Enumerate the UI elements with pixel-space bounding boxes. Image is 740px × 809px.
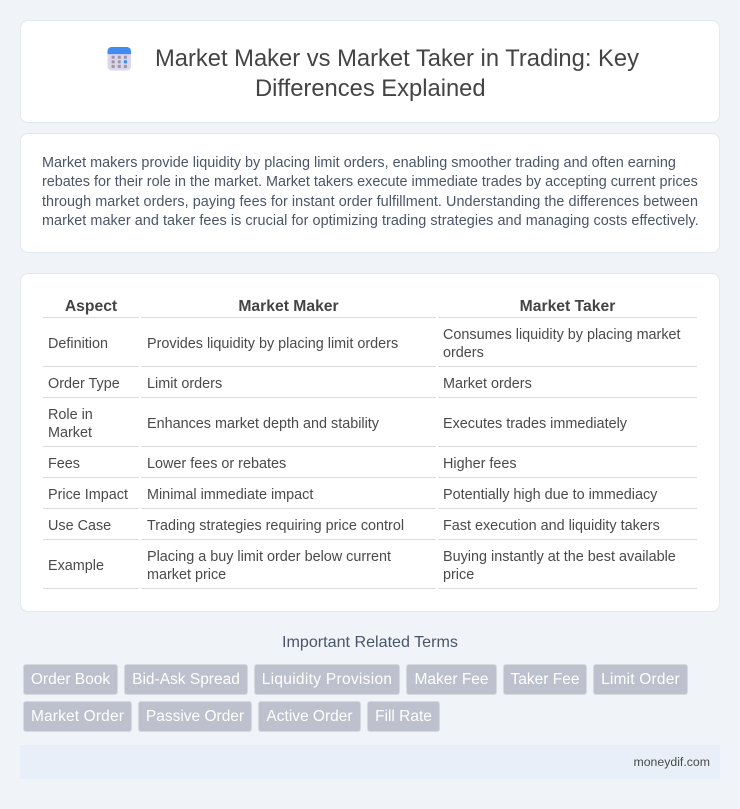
footer: source: moneydif.com: [633, 755, 710, 769]
row: price impact: [48, 487, 658, 503]
title: [155, 45, 639, 102]
tags: related terms: Taker Fee: [511, 671, 579, 688]
title: Differences Explained: [255, 75, 486, 102]
row: use case: Fast execution and liquidity takers: [443, 518, 660, 534]
row: fees: [48, 456, 517, 472]
tags: related terms: Bid-Ask Spread: [132, 671, 240, 688]
panel: description: [20, 133, 720, 253]
row: role in market: Executes trades immediately: [443, 416, 627, 432]
row: example: market price: [147, 567, 226, 583]
table: [43, 298, 697, 589]
row: definition: Provides liquidity by placing limit orders: [147, 336, 398, 352]
row: role in market: Role in: [48, 407, 93, 423]
row: role in market: Enhances market depth and stability: [147, 416, 379, 432]
row: role in market: [48, 407, 627, 441]
panel: comparison table: [20, 273, 720, 612]
title: Market Maker vs Market Taker in Trading: Key: [155, 45, 639, 72]
column headers: Market Taker: [520, 298, 615, 315]
text: description: [42, 155, 699, 229]
column headers: Aspect: [65, 298, 117, 315]
text: description: Market makers provide liquidity by placing limit orders, enabling smoother trading and often earning: [42, 155, 676, 171]
row: definition: Definition: [48, 336, 108, 352]
row: role in market: Market: [48, 425, 92, 441]
row: example: Buying instantly at the best available: [443, 549, 676, 565]
tags: related terms: Order Book: [31, 671, 110, 688]
tags: related terms: Market Order: [31, 708, 124, 725]
row: example: Placing a buy limit order below current: [147, 549, 391, 565]
text: description: market maker and taker fees is crucial for optimizing trading strategies and managing costs effectively.: [42, 213, 699, 229]
icon: calendar: [108, 47, 131, 70]
row: fees: Fees: [48, 456, 80, 472]
heading: related terms: Important Related Terms: [282, 633, 458, 651]
tags: related terms: Passive Order: [146, 708, 244, 725]
row: price impact: Price Impact: [48, 487, 128, 503]
row: fees: Higher fees: [443, 456, 517, 472]
tags: related terms: Fill Rate: [375, 708, 432, 725]
tags: related terms: Active Order: [266, 708, 353, 725]
row: order type: Order Type: [48, 376, 120, 392]
row: order type: [48, 376, 532, 392]
row: example: Example: [48, 558, 104, 574]
row: order type: Limit orders: [147, 376, 222, 392]
row: example: [48, 549, 676, 583]
row: price impact: Potentially high due to immediacy: [443, 487, 657, 503]
column headers: [65, 298, 616, 315]
row: definition: orders: [443, 345, 484, 361]
column headers: Market Maker: [238, 298, 339, 315]
row: use case: Trading strategies requiring price control: [147, 518, 404, 534]
row: definition: Consumes liquidity by placing market: [443, 327, 681, 343]
row: order type: Market orders: [443, 376, 532, 392]
text: description: through market orders, paying fees for instant order fulfillment. Understanding the differences between: [42, 194, 698, 210]
tags: related terms: [23, 664, 688, 732]
footer bar: [20, 745, 720, 779]
row: definition: [48, 327, 681, 361]
row: example: price: [443, 567, 474, 583]
tags: related terms: Maker Fee: [414, 671, 489, 688]
row: use case: [48, 518, 660, 534]
row: fees: Lower fees or rebates: [147, 456, 286, 472]
panel: header: [20, 20, 720, 123]
tags: related terms: Limit Order: [601, 671, 680, 688]
row: use case: Use Case: [48, 518, 111, 534]
tags: related terms: Liquidity Provision: [262, 671, 392, 688]
row: price impact: Minimal immediate impact: [147, 487, 313, 503]
text: description: rebates for their role in the market. Market takers execute immediate trades by accepting current prices: [42, 174, 698, 190]
